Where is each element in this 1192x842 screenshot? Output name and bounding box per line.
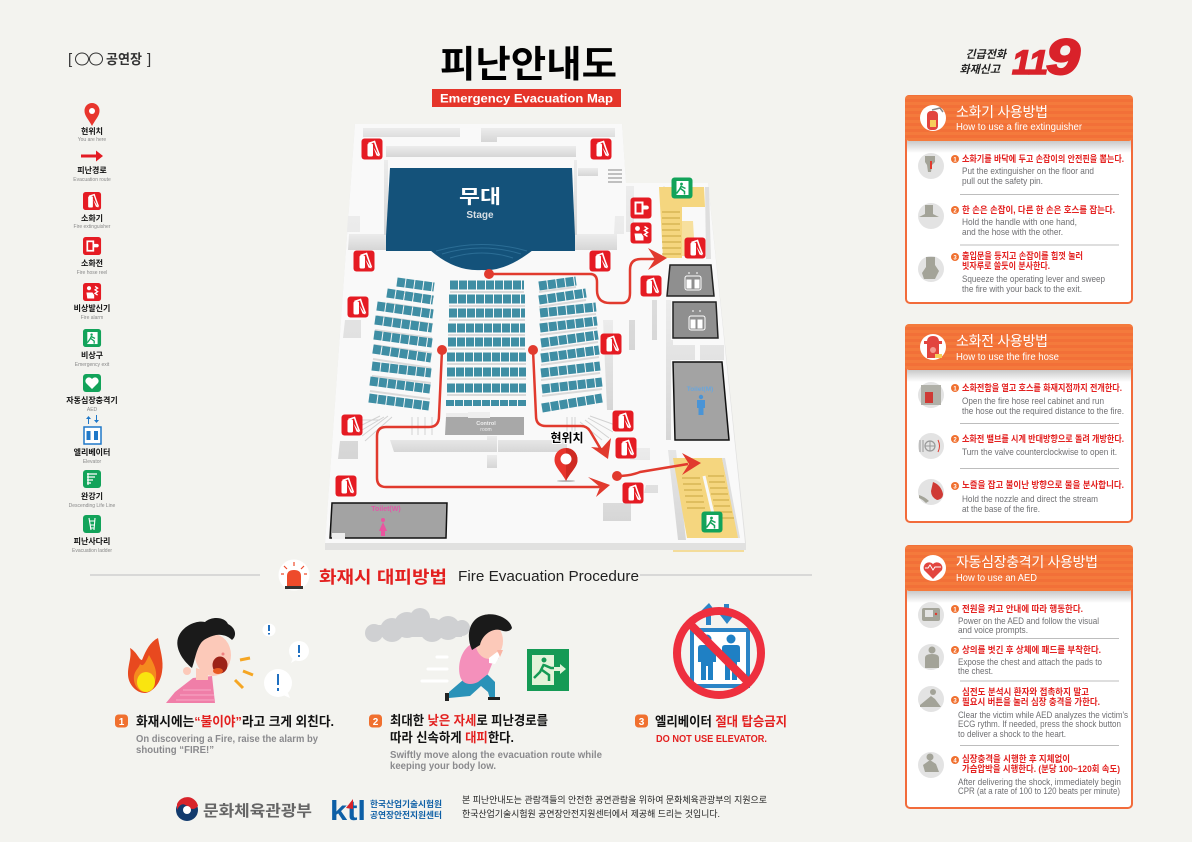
- you are here marker: [550, 430, 584, 482]
- fire extinguisher markers: [336, 138, 706, 504]
- step 3: at the base of the fire.: [962, 504, 1040, 515]
- venue name: 공연장: [106, 52, 143, 67]
- fire alarm marker: [630, 222, 652, 244]
- panel: fire hose: 소화전 사용방법: [956, 333, 1048, 349]
- step 1: Power on the AED and follow the visual: [958, 616, 1099, 627]
- stage: [386, 168, 575, 270]
- panel: fire extinguisher: How to use a fire extinguisher: [956, 122, 1083, 133]
- step 2: 2: [953, 648, 957, 654]
- step 2: 상의를 벗긴 후 상체에 패드를 부착한다.: [962, 644, 1101, 655]
- step 3: 노즐을 잡고 불이난 방향으로 물을 분사합니다.: [962, 479, 1124, 490]
- step 1: the hose out the required distance to the fire.: [962, 406, 1124, 417]
- step 1: pull out the safety pin.: [962, 176, 1043, 187]
- step 2: the chest.: [958, 666, 993, 677]
- legend: emergency exit: [75, 329, 110, 368]
- elevator room 1: [667, 265, 714, 296]
- step 3: ECG rythm. If needed, press the shock button: [958, 719, 1121, 730]
- exit marker bottom: [702, 512, 722, 532]
- step 2: [918, 433, 1124, 459]
- step 2: [918, 644, 1102, 677]
- step 1: and voice prompts.: [958, 625, 1028, 636]
- step 3 text: [635, 714, 787, 745]
- step 2 text: 최대한 낮은 자세로 피난경로를: [390, 713, 548, 728]
- smoke cloud: [365, 608, 470, 642]
- legend: fire hose reel: 소화전: [81, 258, 103, 268]
- logo: 119 emergency call: 긴급전화: [966, 48, 1008, 61]
- legend: descending life line: 완강기: [81, 491, 103, 501]
- icon: hydrant: [920, 334, 946, 360]
- step 3: 3: [953, 698, 957, 704]
- legend: evacuation route: 피난경로: [77, 165, 107, 175]
- hose reel marker: [630, 198, 652, 218]
- seating: [369, 281, 602, 408]
- route markers and arrowheads: [437, 248, 701, 497]
- step 1: 1: [953, 386, 957, 392]
- legend: elevator: [74, 415, 110, 465]
- step 3: the fire with your back to the exit.: [962, 284, 1082, 295]
- building slab: [325, 124, 746, 550]
- step 1: Put the extinguisher on the floor and: [962, 166, 1094, 177]
- step 1: [918, 382, 1124, 417]
- legend: fire alarm: 비상발신기: [74, 303, 110, 313]
- torso and arm: [459, 645, 499, 684]
- legend: evacuation ladder: Evacuation ladder: [72, 548, 112, 554]
- panel: fire hose: How to use the fire hose: [956, 352, 1059, 363]
- step 2: 소화전 밸브를 시계 반대방향으로 돌려 개방한다.: [962, 433, 1124, 444]
- step 1: 소화기를 바닥에 두고 손잡이의 안전핀을 뽑는다.: [962, 153, 1124, 164]
- legend: fire extinguisher: Fire extinguisher: [74, 224, 111, 230]
- venue name: ]: [147, 51, 151, 68]
- legend: fire extinguisher: [74, 192, 111, 230]
- elevator room 2: [673, 302, 718, 338]
- icon: extinguisher: [920, 105, 946, 131]
- men's toilet: Toilet(M): [687, 386, 713, 393]
- step 4: [918, 752, 1121, 797]
- step 2 text: [369, 713, 602, 772]
- step 2 text: keeping your body low.: [390, 760, 496, 772]
- step 3: Clear the victim while AED analyzes the victim's: [958, 710, 1128, 721]
- you are here marker: 현위치: [550, 430, 584, 445]
- step 2: 2: [953, 438, 957, 444]
- legend: elevator: 엘리베이터: [74, 447, 110, 457]
- control room: Control: [476, 421, 496, 427]
- venue name: [: [68, 51, 73, 68]
- legend: fire alarm: [74, 283, 110, 321]
- legend: evacuation ladder: 피난사다리: [74, 536, 110, 546]
- step 3: 빗자루로 쓸듯이 분사한다.: [962, 260, 1050, 271]
- step 1: [918, 153, 1124, 187]
- legend: fire alarm: Fire alarm: [81, 315, 103, 321]
- step 4: CPR (at a rate of 100 to 120 beats per minute): [958, 786, 1120, 797]
- step 4: After delivering the shock, immediately begin: [958, 777, 1121, 788]
- legs: [445, 674, 500, 701]
- legend: you are here: [78, 103, 106, 143]
- legend: evacuation ladder: [72, 515, 112, 554]
- step 3: Hold the nozzle and direct the stream: [962, 494, 1098, 505]
- legend: emergency exit: Emergency exit: [75, 362, 110, 368]
- step 3 illustration: no elevator sign: [677, 603, 761, 695]
- step 1 text: shouting “FIRE!”: [136, 744, 214, 756]
- panel: fire hose: [905, 324, 1133, 522]
- step 4: 가슴압박을 시행한다. (분당 100~120회 속도): [962, 763, 1120, 774]
- step 1: Open the fire hose reel cabinet and run: [962, 396, 1104, 407]
- icon: flame: [128, 638, 163, 693]
- step 3: 출입문을 등지고 손잡이를 힘껏 눌러: [962, 250, 1083, 261]
- title: [432, 44, 621, 107]
- women's toilet: Toilet(W): [371, 506, 401, 513]
- step 2 text: 2: [373, 717, 379, 728]
- exit sign: [527, 649, 569, 691]
- legend: descending life line: Descending Life Line: [69, 503, 116, 509]
- legend: elevator: Elevator: [83, 459, 102, 465]
- legend: descending life line: [69, 470, 116, 509]
- evacuation routes: [377, 259, 688, 487]
- step 3: [918, 479, 1124, 515]
- logo: KTL: 공연장안전지원센터: [370, 810, 442, 820]
- icon: siren: [278, 560, 310, 590]
- step 3 text: DO NOT USE ELEVATOR.: [656, 733, 767, 745]
- stage: 무대: [459, 186, 501, 208]
- logo: 119 emergency call: 11: [1012, 44, 1048, 82]
- section heading: fire evacuation procedure: [90, 560, 812, 590]
- step 1: 전원을 켜고 안내에 따라 행동한다.: [962, 603, 1083, 614]
- logo: ministry: [176, 797, 312, 821]
- step 3: [918, 250, 1105, 295]
- step 1 text: 1: [119, 717, 125, 728]
- panel: fire extinguisher: 소화기 사용방법: [956, 104, 1048, 120]
- panel: fire extinguisher: [905, 95, 1133, 303]
- walls: [338, 128, 724, 540]
- legend: evacuation route: [73, 150, 111, 183]
- legend: you are here: 현위치: [81, 126, 103, 136]
- panel: AED: [905, 545, 1133, 808]
- legend: fire hose reel: Fire hose reel: [77, 270, 107, 276]
- legend: emergency exit: 비상구: [81, 350, 104, 360]
- step 2 text: Swiftly move along the evacuation route while: [390, 749, 602, 761]
- step 2: 한 손은 손잡이, 다른 한 손은 호스를 잡는다.: [962, 204, 1115, 215]
- step 3: 필요시 버튼을 눌러 심장 충격을 가한다.: [962, 696, 1100, 707]
- step 3: to deliver a shock to the heart.: [958, 729, 1066, 740]
- logo: 119 emergency call: [960, 29, 1080, 85]
- legend: evacuation route: Evacuation route: [73, 177, 111, 183]
- step 3: 심전도 분석시 환자와 접촉하지 말고: [962, 686, 1089, 697]
- step 1 text: 화재시에는“불이야”라고 크게 외친다.: [136, 714, 334, 729]
- step 1: [918, 602, 1099, 636]
- step 1: 1: [953, 158, 957, 164]
- stage: Stage: [466, 210, 494, 221]
- step 2: and the hose with the other.: [962, 227, 1063, 238]
- control room: room: [480, 427, 492, 433]
- step 3: 3: [953, 256, 957, 262]
- floor plan: [325, 124, 746, 552]
- legend: fire hose reel: [77, 237, 107, 276]
- step 2: Expose the chest and attach the pads to: [958, 657, 1102, 668]
- step 2: Hold the handle with one hand,: [962, 217, 1077, 228]
- legend: AED: [66, 374, 118, 413]
- step 3 text: 3: [639, 717, 645, 728]
- step 1: 소화전함을 열고 호스를 화재지점까지 전개한다.: [962, 382, 1122, 393]
- lower stairs: [673, 458, 740, 538]
- title: Emergency Evacuation Map: [440, 94, 613, 106]
- footer logos and note: [176, 794, 767, 826]
- step 3: Squeeze the operating lever and sweep: [962, 274, 1105, 285]
- section heading: fire evacuation procedure: Fire Evacuation Procedure: [458, 568, 639, 585]
- step 1 text: [115, 714, 334, 756]
- step 4: 4: [953, 758, 957, 764]
- legend: AED: 자동심장충격기: [66, 395, 118, 405]
- step 1: 1: [953, 608, 957, 614]
- step 4: 심장충격을 시행한 후 지체없이: [962, 753, 1070, 764]
- step 2: [918, 203, 1115, 238]
- step 2 illustration: crouching person, smoke, exit sign: [365, 608, 569, 701]
- logo: ministry: 문화체육관광부: [203, 802, 312, 820]
- legend: you are here: You are here: [78, 137, 106, 143]
- disclaimer: 한국산업기술시험원 공연장안전지원센터에서 제공해 드리는 것입니다.: [462, 808, 720, 819]
- logo: 119 emergency call: 화재신고: [960, 63, 1001, 76]
- section heading: fire evacuation procedure: 화재시 대피방법: [319, 568, 447, 587]
- step 1 text: On discovering a Fire, raise the alarm by: [136, 733, 318, 745]
- step 2: Turn the valve counterclockwise to open it.: [962, 447, 1117, 458]
- logo: KTL: [330, 795, 442, 826]
- legend: fire extinguisher: 소화기: [81, 213, 103, 223]
- upper stairs: [659, 187, 711, 259]
- legend: AED: AED: [87, 407, 98, 413]
- step 3 text: 엘리베이터 절대 탑승금지: [655, 714, 787, 729]
- panel: AED: 자동심장충격기 사용방법: [956, 554, 1098, 570]
- legend: [66, 103, 118, 554]
- logo: 119 emergency call: 9: [1046, 29, 1080, 85]
- disclaimer: 본 피난안내도는 관람객들의 안전한 공연관람을 위하여 문화체육관광부의 지원으로: [462, 794, 767, 805]
- step 3: [918, 686, 1128, 740]
- speech bubbles: [262, 624, 309, 698]
- control room: [445, 412, 524, 435]
- stair fans: [360, 170, 622, 441]
- venue name: [68, 51, 151, 68]
- women's toilet: [330, 503, 447, 539]
- disclaimer: [462, 794, 767, 819]
- step 1 illustration: shouting person and fire: [128, 618, 309, 703]
- logo: KTL: 한국산업기술시험원: [370, 799, 442, 809]
- step 3: 3: [953, 484, 957, 490]
- panel: AED: How to use an AED: [956, 573, 1037, 584]
- step 2: 2: [953, 208, 957, 214]
- logo: KTL: ktl: [330, 795, 366, 826]
- exit marker top: [672, 178, 692, 198]
- icon: heart: [920, 555, 946, 581]
- men's toilet: [673, 362, 729, 440]
- step 2 text: 따라 신속하게 대피한다.: [390, 730, 514, 745]
- title: 피난안내도: [440, 44, 617, 85]
